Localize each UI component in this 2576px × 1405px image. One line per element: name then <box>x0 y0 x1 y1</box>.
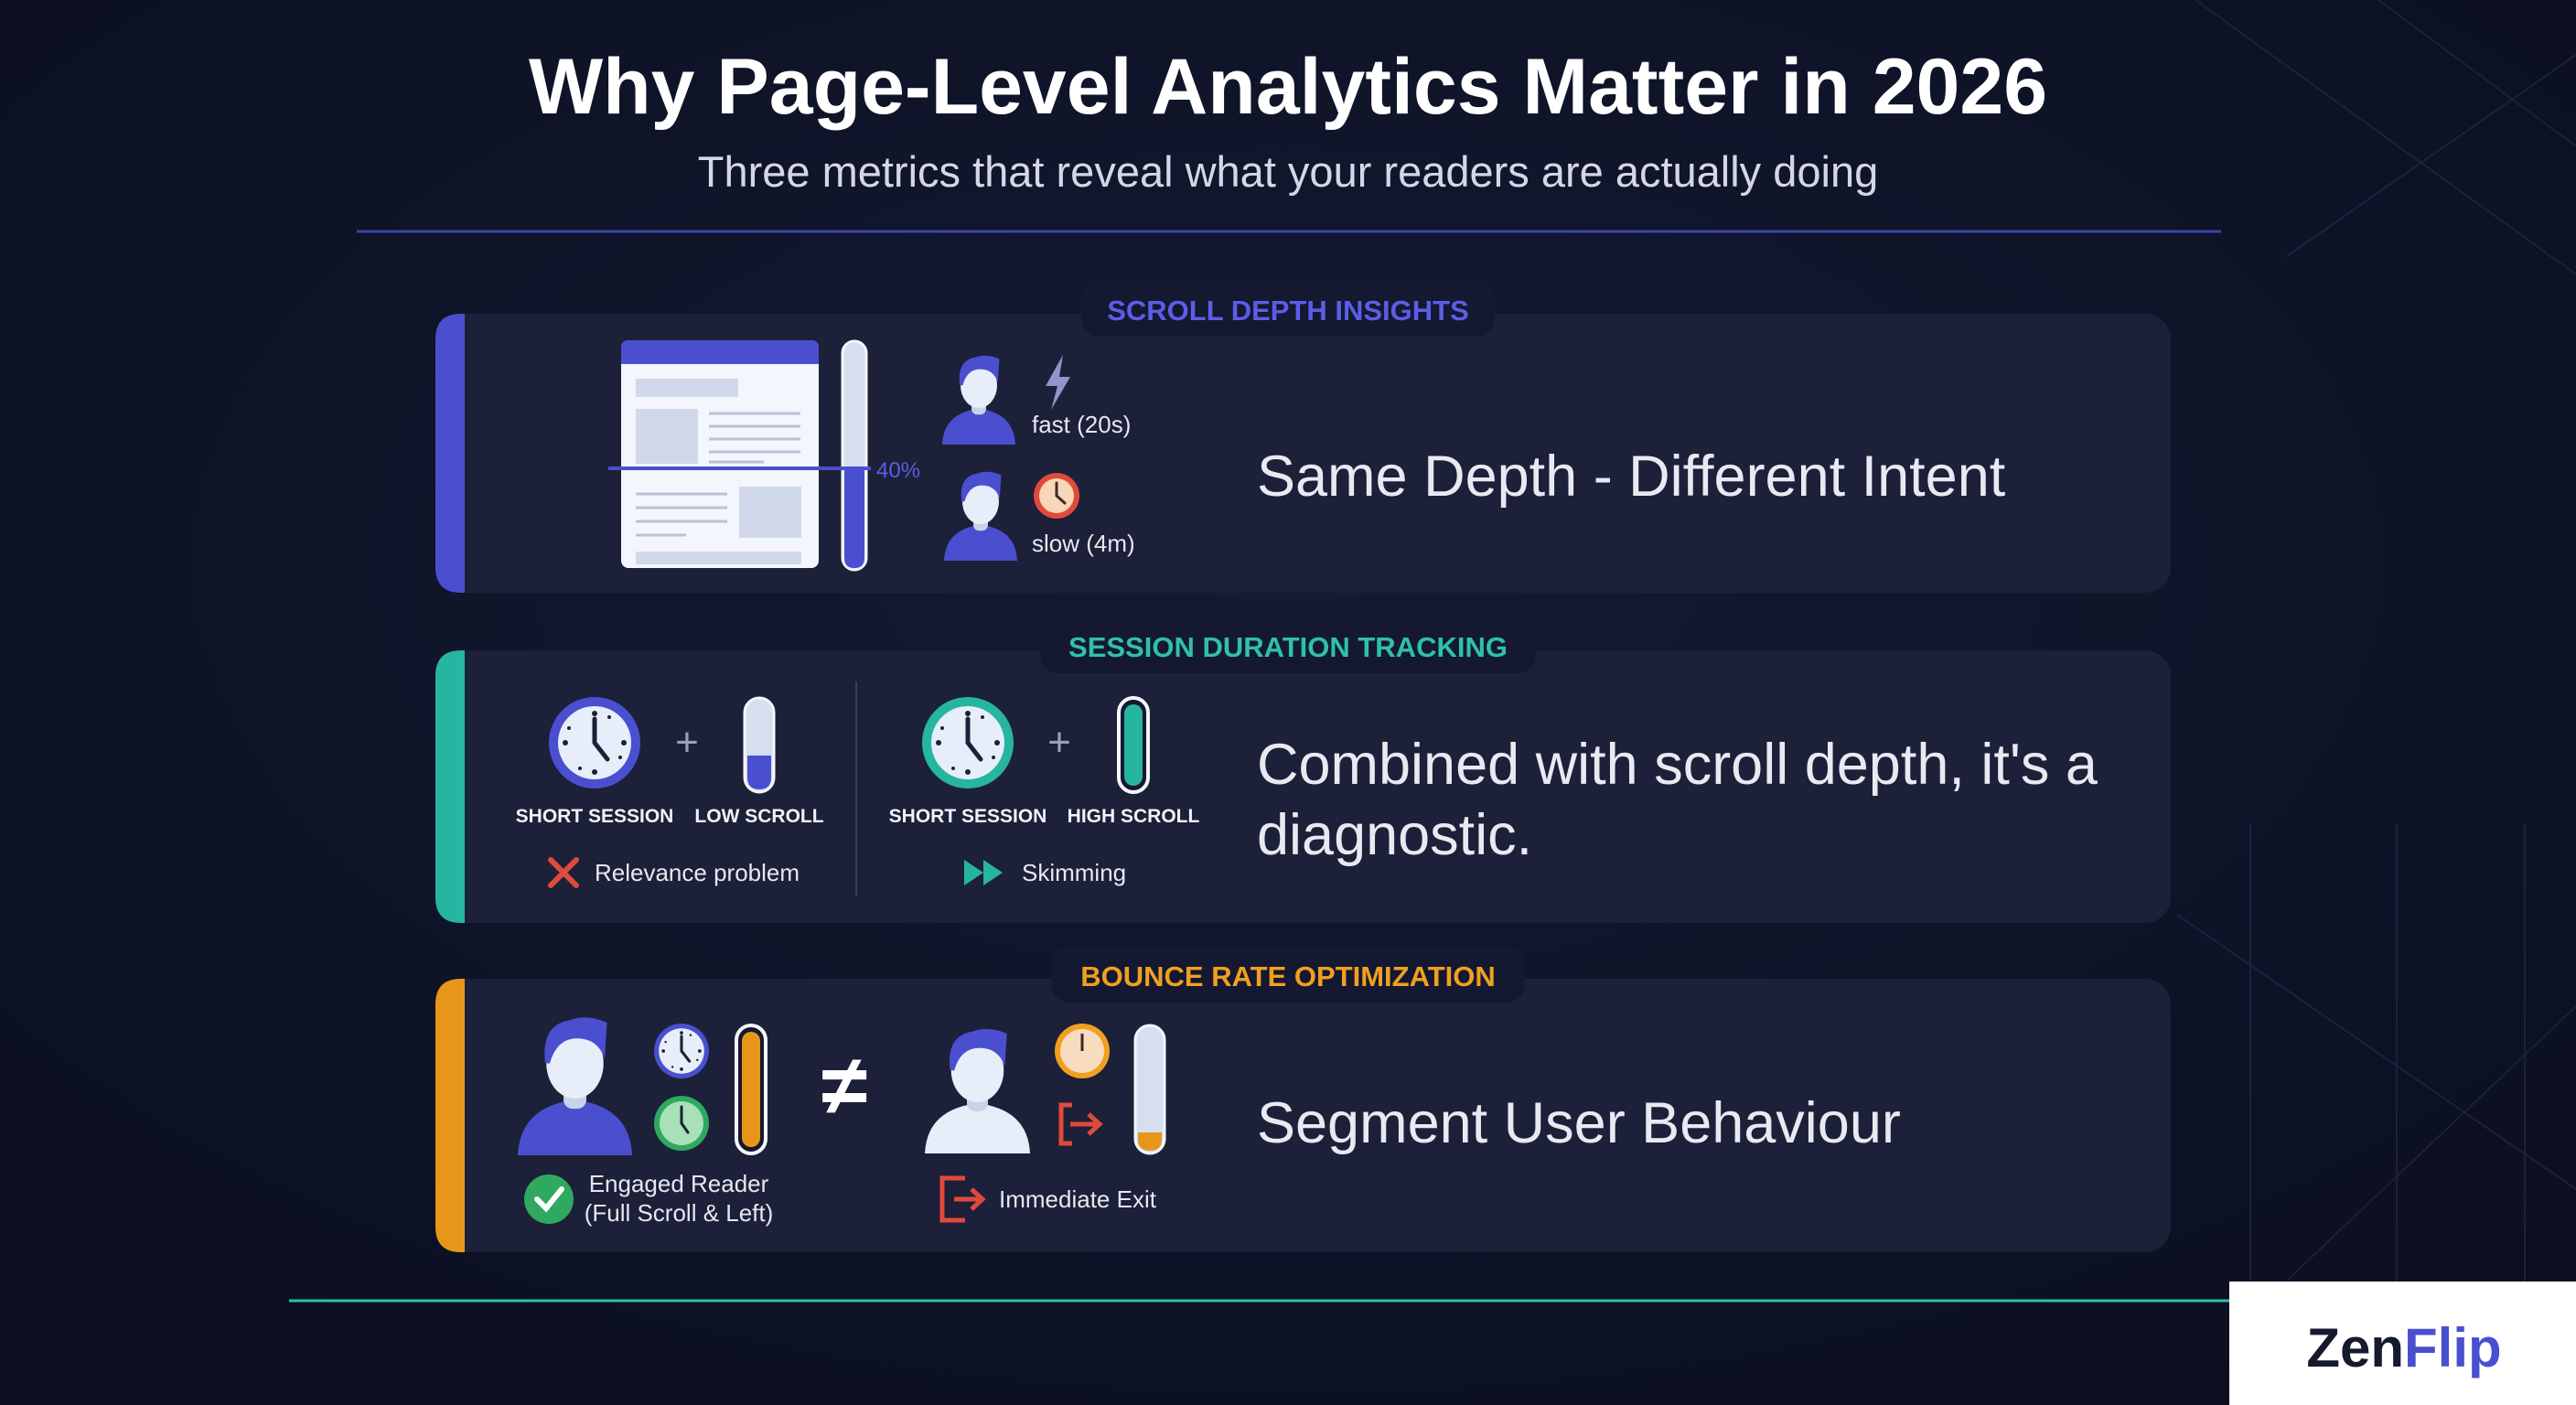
icon: document page <box>621 340 819 568</box>
title: Why Page-Level Analytics Matter in 2026 <box>529 43 2047 131</box>
icon: teal clock <box>922 697 1014 788</box>
relevance problem: Relevance problem <box>595 859 800 886</box>
icon: scroll bar 40%: 40% <box>876 458 920 483</box>
panel: session duration <box>435 617 2171 923</box>
panel: session duration: + <box>1047 720 1071 765</box>
engaged reader label: (Full Scroll & Left) <box>585 1199 773 1227</box>
icon: low scroll <box>745 698 774 792</box>
panel text: diagnostic: Combined with scroll depth, it's a <box>1257 733 2098 797</box>
tab heading: session duration tracking: SESSION DURATION TRACKING <box>1068 631 1508 663</box>
engaged reader label: Engaged Reader <box>589 1170 769 1197</box>
icon: blue clock <box>549 697 640 788</box>
panel text: diagnostic: diagnostic. <box>1257 803 1532 867</box>
fast reader <box>942 355 1131 445</box>
immediate exit label: Immediate Exit <box>999 1185 1157 1213</box>
tab heading: session duration tracking <box>1040 617 1536 673</box>
not equal sign: ≠ <box>821 1039 867 1132</box>
engaged reader icons <box>518 1017 766 1155</box>
fast reader: fast (20s) <box>1032 411 1131 438</box>
logo: ZenFlip <box>2229 1282 2576 1405</box>
slow reader: slow (4m) <box>1032 530 1135 557</box>
panel: session duration: HIGH SCROLL <box>1068 806 1199 827</box>
panel: bounce rate <box>435 946 2171 1252</box>
panel: session duration: + <box>675 720 699 765</box>
slow reader <box>944 472 1135 561</box>
skimming: Skimming <box>1022 859 1126 886</box>
panel: scroll depth <box>435 280 2171 593</box>
skimming <box>964 859 1126 886</box>
panel text: segment: Segment User Behaviour <box>1257 1091 1901 1155</box>
tab heading: bounce rate optimization: BOUNCE RATE OPTIMIZATION <box>1080 960 1496 992</box>
subtitle: Three metrics that reveal what your readers are actually doing <box>698 147 1878 196</box>
tab heading: scroll depth insights: SCROLL DEPTH INSIGHTS <box>1107 295 1469 327</box>
tab heading: bounce rate optimization <box>1051 946 1525 1003</box>
panel: session duration: SHORT SESSION <box>889 806 1046 827</box>
immediate exit label <box>942 1178 1157 1220</box>
panel: session duration: SHORT SESSION <box>516 806 673 827</box>
immediate exit icons <box>925 1024 1165 1153</box>
panel text: same depth: Same Depth - Different Intent <box>1257 445 2006 509</box>
logo: ZenFlip: ZenFlip <box>2306 1317 2502 1378</box>
icon: scroll bar 40% <box>608 341 920 570</box>
engaged reader label <box>524 1170 773 1227</box>
icon: high scroll <box>1119 698 1148 792</box>
panel: session duration: LOW SCROLL <box>694 806 824 827</box>
tab heading: scroll depth insights <box>1081 280 1495 337</box>
